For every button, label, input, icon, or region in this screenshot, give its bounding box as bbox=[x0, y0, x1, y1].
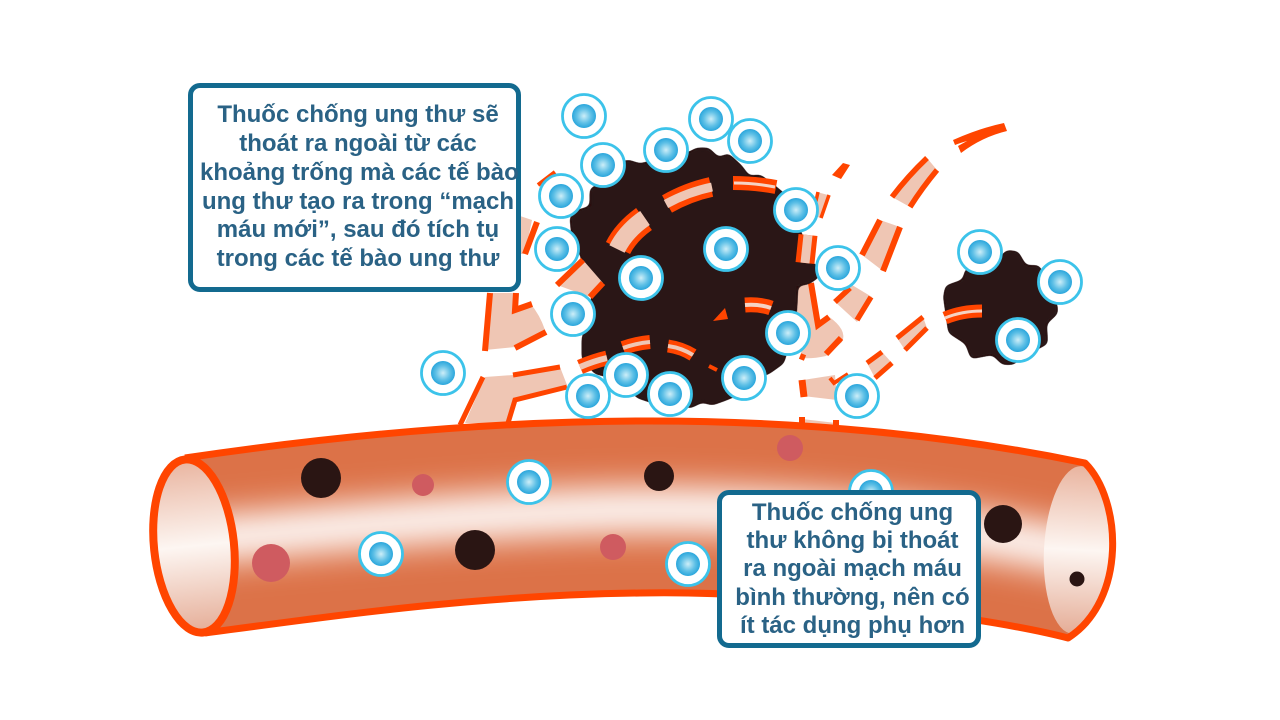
callout: drug leaks through new vessel gaps: máu mới”, sau đó tích tụ bbox=[217, 216, 499, 243]
callout: drug leaks through new vessel gaps: khoảng trống mà các tế bào bbox=[200, 159, 519, 186]
drug particles bbox=[360, 94, 1082, 586]
callout: normal vessels keep drug inside: ra ngoài mạch máu bbox=[743, 555, 962, 582]
callout: normal vessels keep drug inside: bình thường, nên có bbox=[735, 584, 970, 611]
main blood vessel bbox=[145, 421, 1114, 638]
large tumour bbox=[572, 150, 817, 406]
diagram: blood vessel, tumours and drug particles bbox=[149, 93, 1116, 642]
callout: drug leaks through new vessel gaps bbox=[188, 83, 521, 292]
callout: drug leaks through new vessel gaps: thoát ra ngoài từ các bbox=[239, 130, 477, 157]
callout: drug leaks through new vessel gaps: ung thư tạo ra trong “mạch bbox=[202, 188, 514, 215]
blood cells: red bbox=[252, 435, 803, 582]
callout: normal vessels keep drug inside: thư không bị thoát bbox=[746, 527, 958, 554]
small tumour bbox=[945, 252, 1056, 363]
callout: normal vessels keep drug inside: ít tác dụng phụ hơn bbox=[740, 612, 965, 639]
branch vessels outside tumour bbox=[460, 123, 1007, 428]
vessel segments over tumour bbox=[557, 183, 982, 370]
callout: drug leaks through new vessel gaps: trong các tế bào ung thư bbox=[217, 245, 499, 272]
blood cells: black bbox=[301, 458, 1084, 586]
callout: drug leaks through new vessel gaps: Thuốc chống ung thư sẽ bbox=[217, 101, 499, 128]
callout: normal vessels keep drug inside: Thuốc chống ung bbox=[752, 499, 953, 526]
callout: normal vessels keep drug inside bbox=[717, 490, 981, 648]
